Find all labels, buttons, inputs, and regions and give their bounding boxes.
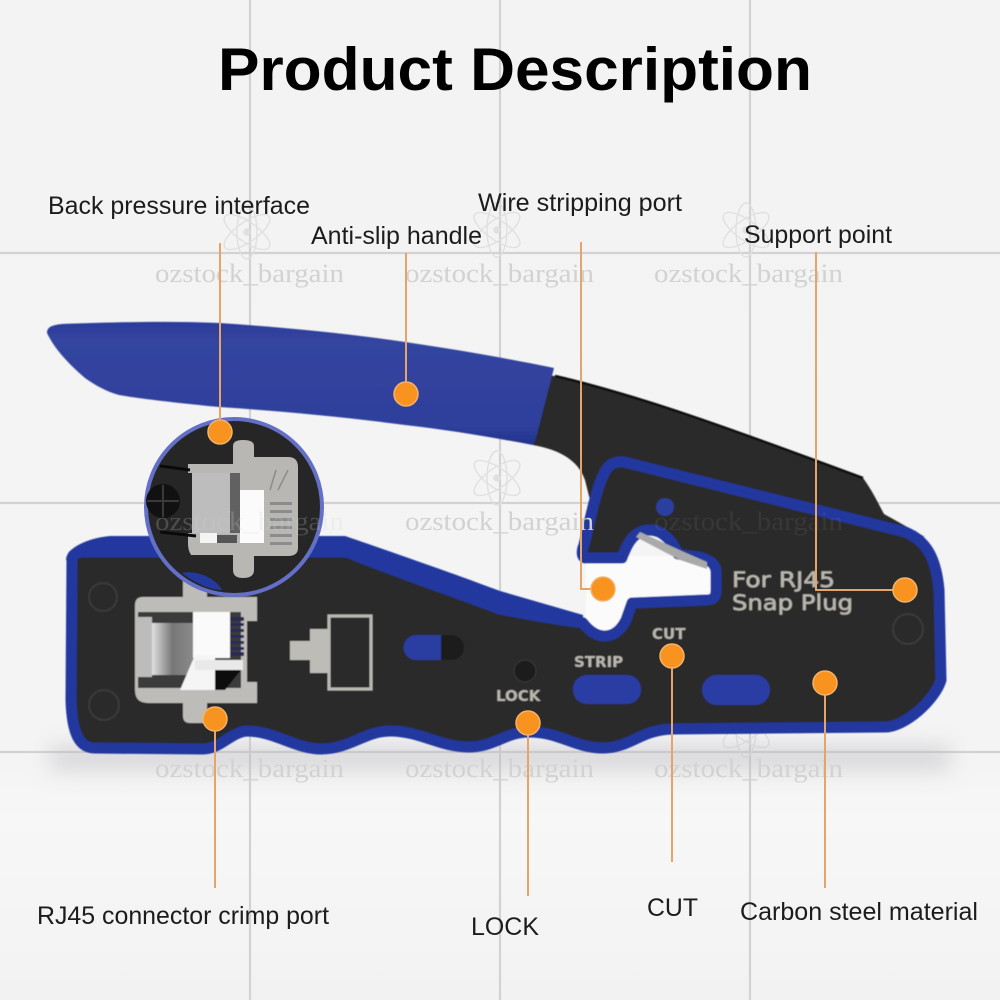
jaw blue dot [656,498,674,516]
label: back pressure interface: Back pressure interface [48,192,310,220]
label: anti-slip handle: Anti-slip handle [311,222,482,250]
label: wire stripping port: Wire stripping port [478,189,682,217]
printed tool labels: CUT [652,625,686,643]
callout dots [203,382,917,735]
watermark text: ozstock_bargain [654,754,843,783]
blade [636,532,707,569]
body blue top band [66,536,583,628]
RJ45 connector crimp port [135,580,257,723]
watermark text: ozstock_bargain [155,259,344,288]
cut slot [702,675,770,705]
title: Product Description [218,36,812,103]
label: RJ45 connector crimp port: RJ45 connector crimp port [37,902,329,930]
printed tool labels: Snap Plug [732,591,853,615]
handle: steel upper arm [533,374,925,537]
printed tool labels [496,568,853,705]
callout lines [215,242,905,896]
tool body [71,462,941,749]
watermark text: ozstock_bargain [405,507,594,536]
lock slider [404,635,464,660]
watermark text [155,259,843,783]
printed tool labels: STRIP [574,653,623,671]
screws [89,583,923,720]
inset magnifier: back pressure interface [146,419,322,595]
watermark text: ozstock_bargain [654,259,843,288]
printed tool labels: LOCK [496,687,542,705]
label: carbon steel material: Carbon steel material [740,898,978,926]
label: support point: Support point [744,221,892,249]
label: cut: CUT [647,894,698,922]
watermark atoms [219,203,774,757]
crimping tool [47,322,941,749]
handle: blue anti-slip grip [47,322,554,445]
watermark text: ozstock_bargain [155,507,344,536]
printed tool labels: For RJ45 [732,568,835,592]
lock button [514,660,536,682]
connector outline icon [290,616,371,689]
watermark text: ozstock_bargain [405,754,594,783]
watermark text: ozstock_bargain [155,754,344,783]
label: lock: LOCK [471,913,539,941]
watermark text: ozstock_bargain [405,259,594,288]
tool shadow [50,746,950,770]
jaw gap [586,556,716,631]
watermark text: ozstock_bargain [654,507,843,536]
strip slot [573,675,641,704]
